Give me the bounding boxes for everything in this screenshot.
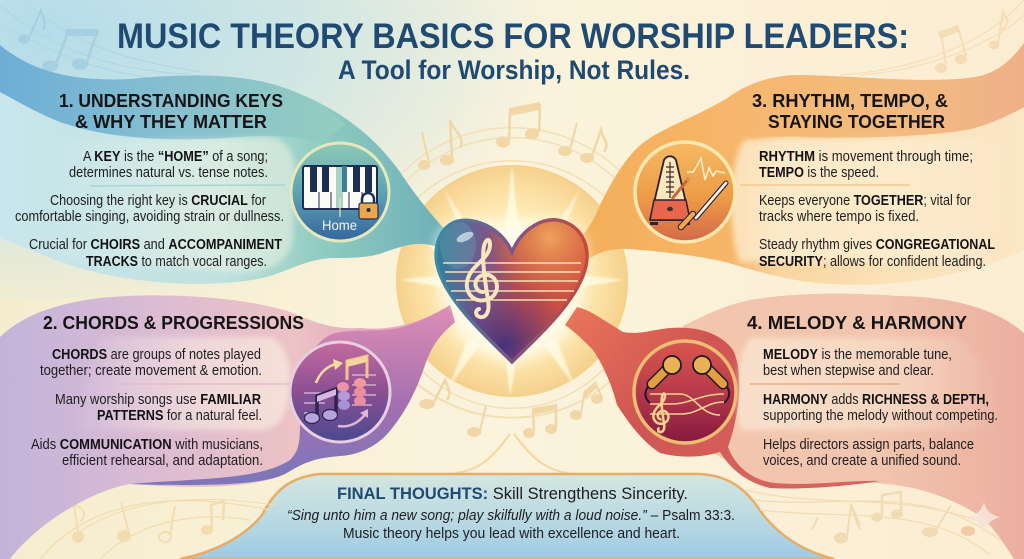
panel 1: understanding keys [0, 45, 455, 284]
panel 1 text highlight [50, 138, 295, 272]
panel 3 shape [572, 43, 1024, 285]
panel 3 heading: STAYING TOGETHER [768, 112, 945, 132]
notch lines above final panel [455, 434, 569, 473]
scripture quote: “Sing unto him a new song; play skilfully with a loud noise.” – Psalm 33:3. [287, 508, 735, 524]
panel 2 paragraph: chords: CHORDS are groups of notes played [52, 347, 261, 363]
decorative music notes: bottom left [40, 499, 275, 559]
panel 2 heading: 2. CHORDS & PROGRESSIONS [43, 313, 304, 333]
final heading: FINAL THOUGHTS: Skill Strengthens Sincerity. [337, 485, 688, 503]
panel 3 paragraph: security [759, 237, 995, 270]
panel 2: chords and progressions [0, 295, 455, 559]
decorative music notes: bottom right [745, 490, 1000, 555]
panel 2 paragraph: patterns: PATTERNS for a natural feel. [97, 408, 262, 424]
panel 3 paragraph: security: SECURITY; allows for confident leading. [759, 254, 986, 270]
panel 3 heading band [695, 43, 1024, 150]
panel 1 paragraph: choirs: Crucial for CHOIRS and ACCOMPANIMENT [29, 237, 282, 253]
panel 2 paragraph: communication [31, 437, 263, 469]
panel 3 paragraph: security: Steady rhythm gives CONGREGATIONAL [759, 237, 995, 253]
panel 4 paragraph: directors [763, 437, 974, 469]
panel 3 paragraph: rhythm: TEMPO is the speed. [759, 165, 879, 181]
glow disc [396, 165, 628, 397]
panel 4 text highlight [737, 338, 1000, 430]
panel 1 heading: & WHY THEY MATTER [75, 112, 267, 132]
panel 4 paragraph: directors: voices, and create a unified sound. [763, 453, 961, 469]
heart highlight [455, 230, 475, 244]
panel 1 paragraph: choirs [29, 237, 282, 270]
icon: microphones and clef [634, 341, 736, 443]
panel 1 paragraph: key [69, 149, 268, 181]
icon: central heart with music staff [430, 210, 595, 365]
decorative music notes: top left [0, 5, 200, 80]
panel 4: melody and harmony [565, 294, 1024, 559]
icon: piano keys with lock [291, 143, 389, 241]
panel 1 shape [0, 45, 455, 284]
panel 3 heading: 3. RHYTHM, TEMPO, & [752, 91, 948, 111]
panel 1 heading: 1. UNDERSTANDING KEYS [59, 91, 283, 111]
panel 3 paragraph: together: Keeps everyone TOGETHER; vital for [759, 193, 971, 209]
heart staff lines [443, 263, 581, 300]
panel 4 paragraph: harmony: HARMONY adds RICHNESS & DEPTH, [763, 392, 989, 408]
panel 3 paragraph: together [759, 193, 971, 225]
panel 2 paragraph: patterns: Many worship songs use FAMILIAR [55, 392, 261, 408]
panel 1 paragraph: key: A KEY is the “HOME” of a song; [83, 149, 268, 165]
panel 1 heading [59, 91, 283, 132]
icon: chord notes with arrows [290, 342, 390, 442]
panel 2 paragraph: chords [40, 347, 262, 379]
panel 4 paragraph: harmony: supporting the melody without competing. [763, 408, 998, 424]
panel 3 text highlight [731, 138, 1010, 262]
panel 2 paragraph: communication: efficient rehearsal, and adaptation. [62, 453, 263, 469]
icon: metronome and baton [635, 142, 735, 242]
panel 1 paragraph: key: determines natural vs. tense notes. [69, 165, 268, 181]
panel 4 paragraph: directors: Helps directors assign parts, balance [763, 437, 974, 453]
panel 1 paragraph: choosing: Choosing the right key is CRUCIAL for [50, 193, 266, 209]
title: MUSIC THEORY BASICS FOR WORSHIP LEADERS: [117, 17, 909, 56]
final panel background [180, 474, 834, 559]
light rays [400, 165, 624, 397]
panel 4 paragraph: melody [763, 347, 952, 379]
subtitle: A Tool for Worship, Not Rules. [338, 55, 690, 85]
panel 3: rhythm and tempo [572, 43, 1024, 285]
stave arcs [392, 128, 632, 418]
panel 2 paragraph: chords: together; create movement & emotion. [40, 363, 262, 379]
panel 2 ribbon [130, 305, 455, 485]
panel 2 text highlight [70, 337, 290, 430]
closing line: Music theory helps you lead with excellence and heart. [343, 526, 680, 542]
decorative music notes: top right [840, 0, 1024, 75]
panel 4 ribbon [565, 307, 880, 489]
panel 2 paragraph: patterns [55, 392, 262, 424]
panel 1 paragraph: choirs: TRACKS to match vocal ranges. [86, 254, 267, 270]
panel 2 paragraph: communication: Aids COMMUNICATION with musicians, [31, 437, 263, 453]
decorative music notes around heart [418, 102, 606, 438]
panel 3 paragraph: rhythm [759, 149, 973, 181]
panel 4 paragraph: melody: best when stepwise and clear. [763, 363, 934, 379]
panel 4 paragraph: melody: MELODY is the memorable tune, [763, 347, 952, 363]
panel 3 heading [752, 91, 948, 132]
icon: piano keys with lock: Home [322, 217, 357, 233]
panel 1 paragraph: choosing: comfortable singing, avoiding strain or dullness. [15, 209, 284, 225]
heart treble clef [467, 240, 497, 317]
central glow and stave arcs [392, 128, 632, 418]
panel: final thoughts [180, 434, 834, 559]
panel 1 heading band [0, 45, 345, 142]
icon: sparkle [967, 502, 1000, 533]
panel 4 heading: 4. MELODY & HARMONY [747, 313, 967, 333]
panel 3 paragraph: together: tracks where tempo is fixed. [759, 209, 919, 225]
panel 2 shape [0, 295, 455, 559]
panel 1 paragraph: choosing [15, 193, 284, 225]
panel 4 shape [683, 294, 1024, 559]
panel 3 paragraph: rhythm: RHYTHM is movement through time; [759, 149, 973, 165]
panel 4 paragraph: harmony [763, 392, 998, 424]
